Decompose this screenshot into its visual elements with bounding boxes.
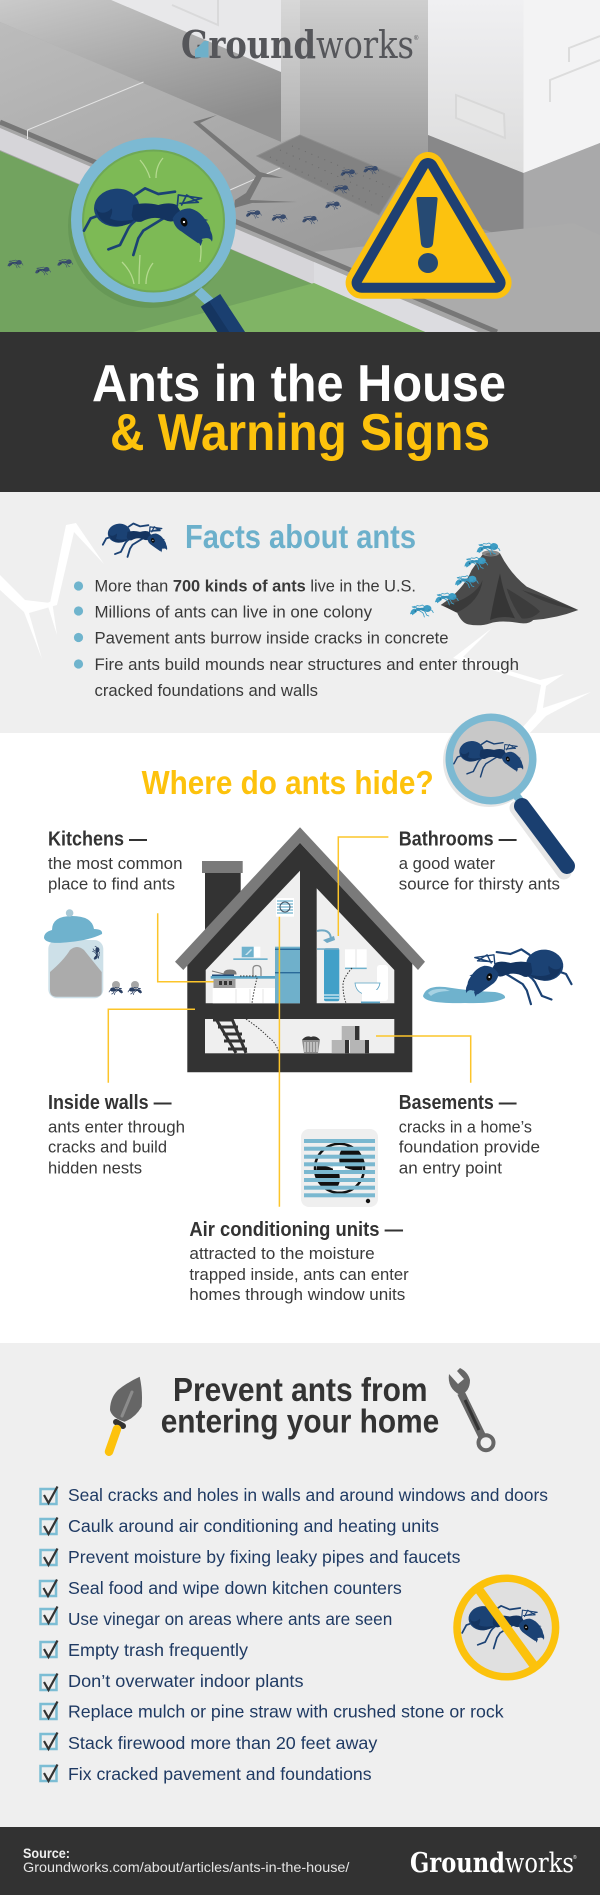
checklist: Fix cracked pavement and foundations xyxy=(68,1764,372,1784)
callout: bathrooms: a good water xyxy=(399,854,495,873)
logo: Groundworks white xyxy=(410,1848,577,1879)
callout: inside walls: cracks and build xyxy=(48,1138,167,1157)
house cross-section illustration xyxy=(175,827,425,1072)
icon: trowel xyxy=(109,1377,142,1452)
logo: Groundworks white: Ground xyxy=(410,1848,505,1879)
panel: facts about ants xyxy=(0,492,600,735)
title banner: Ants in the House xyxy=(92,355,506,413)
callout: basements: foundation provide xyxy=(399,1138,540,1157)
checklist: Seal food and wipe down kitchen counters xyxy=(68,1578,402,1598)
callout: air conditioning units xyxy=(189,1219,409,1304)
logo: Groundworks: Ground xyxy=(181,22,316,67)
callout: air conditioning units: homes through window units xyxy=(189,1285,405,1304)
connector lines from callouts to house xyxy=(108,837,471,1207)
callout: kitchens: Kitchens — xyxy=(48,829,147,851)
callout: bathrooms: source for thirsty ants xyxy=(399,874,560,893)
icon: wrench xyxy=(449,1368,494,1450)
checklist: Prevent moisture by fixing leaky pipes and faucets xyxy=(68,1547,461,1567)
callout: air conditioning units: attracted to the moisture xyxy=(189,1244,375,1263)
basement contents xyxy=(213,1019,369,1053)
callout: inside walls xyxy=(48,1092,185,1177)
kitchen fixtures xyxy=(211,898,300,1003)
heading: where do ants hide: Where do ants hide? xyxy=(142,764,434,801)
icon: ant beside facts heading xyxy=(103,523,167,557)
callout: kitchens xyxy=(48,829,182,893)
icon: warning triangle xyxy=(362,168,496,283)
callout: bathrooms xyxy=(399,829,560,893)
heading: prevent ants: entering your home xyxy=(161,1403,439,1440)
icon: window air conditioner xyxy=(301,1129,378,1207)
bullet list: facts: More than 700 kinds of ants live in the U.S. xyxy=(94,577,416,596)
bullet list: facts: Pavement ants burrow inside cracks in concrete xyxy=(94,629,448,648)
callout: kitchens: place to find ants xyxy=(48,874,175,893)
heading: facts about ants: Facts about ants xyxy=(185,518,416,555)
checklist: Empty trash frequently xyxy=(68,1640,248,1660)
callout: air conditioning units: trapped inside, ants can enter xyxy=(189,1265,409,1284)
icon: magnifying glass with ant xyxy=(443,714,567,872)
checklist: Use vinegar on areas where ants are seen xyxy=(68,1609,392,1629)
callout: inside walls: hidden nests xyxy=(48,1158,142,1177)
callout: air conditioning units: Air conditioning units — xyxy=(189,1219,403,1241)
basement xyxy=(205,1019,394,1053)
logo: Groundworks white: works xyxy=(505,1848,574,1879)
callout: basements: an entry point xyxy=(399,1158,502,1177)
callout: kitchens: the most common xyxy=(48,854,182,873)
heading: prevent ants xyxy=(161,1371,439,1440)
icon: magnifying glass over ant on grass xyxy=(68,138,245,356)
callout: bathrooms: Bathrooms — xyxy=(399,829,517,851)
source citation xyxy=(23,1845,350,1875)
logo: Groundworks xyxy=(181,22,419,67)
footer xyxy=(0,1827,600,1895)
icon: no ants sign xyxy=(457,1578,556,1677)
hero illustration: cracked pavement and house wall xyxy=(0,0,600,335)
bullet list: facts: Fire ants build mounds near structures and enter through xyxy=(94,655,519,674)
bullet list: facts: Millions of ants can live in one colony xyxy=(94,603,372,622)
callout: basements xyxy=(399,1092,540,1177)
pavement crack xyxy=(193,115,297,208)
icon: ant mound xyxy=(410,543,578,625)
callout: basements: cracks in a home’s xyxy=(399,1117,532,1136)
checklist: Don’t overwater indoor plants xyxy=(68,1671,304,1691)
icon: ant drinking from puddle xyxy=(423,948,571,1004)
title banner: & Warning Signs xyxy=(110,404,490,462)
callout: basements: Basements — xyxy=(399,1092,517,1114)
panel: where do ants hide xyxy=(0,714,600,1343)
checklist: Replace mulch or pine straw with crushed stone or rock xyxy=(68,1702,504,1722)
panel: prevent ants xyxy=(0,1343,600,1829)
bullet list: facts xyxy=(74,577,519,700)
source citation: Groundworks.com/about/articles/ants-in-the-house/ xyxy=(23,1859,350,1875)
title banner xyxy=(0,332,600,492)
left room xyxy=(206,871,300,1003)
heading: prevent ants: Prevent ants from xyxy=(173,1371,428,1408)
source citation: Source: xyxy=(23,1845,70,1861)
checklist xyxy=(40,1485,548,1784)
callout: inside walls: ants enter through xyxy=(48,1117,185,1136)
checklist: Seal cracks and holes in walls and around windows and doors xyxy=(68,1485,548,1505)
callout: inside walls: Inside walls — xyxy=(48,1092,172,1114)
logo: Groundworks: ® xyxy=(414,35,419,42)
bullet list: facts: cracked foundations and walls xyxy=(94,681,318,700)
door mat xyxy=(257,135,402,215)
logo: Groundworks: works xyxy=(316,23,414,67)
right room xyxy=(317,888,394,1003)
small ants on pavement xyxy=(8,166,379,275)
checklist: Stack firewood more than 20 feet away xyxy=(68,1733,378,1753)
bathroom fixtures xyxy=(317,930,388,1003)
checklist: Caulk around air conditioning and heating units xyxy=(68,1516,439,1536)
logo: Groundworks white: ® xyxy=(573,1854,577,1861)
icon: sugar jar with ants xyxy=(44,909,142,998)
